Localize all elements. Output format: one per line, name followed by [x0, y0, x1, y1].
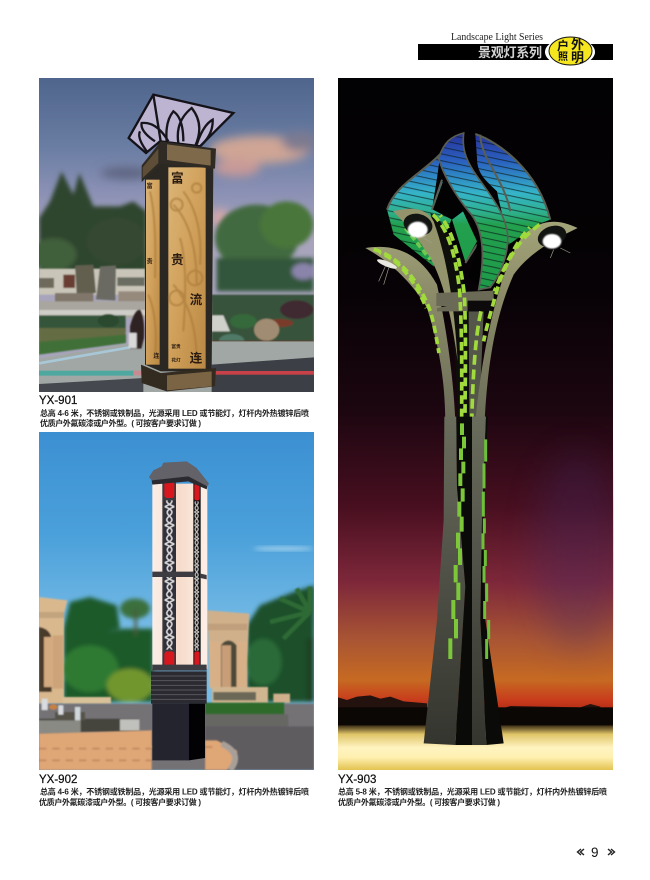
carved characters: 连 — [153, 351, 159, 360]
column cap — [142, 141, 216, 182]
lamp column — [149, 461, 209, 760]
page number — [578, 845, 614, 860]
centre collar — [436, 291, 494, 311]
base — [152, 704, 189, 760]
center leaf in front — [439, 133, 508, 290]
description: YX-902: 优质户外氟碳漆或户外型。( 可按客户要求订做 ) — [39, 797, 201, 807]
lamp top: lotus canopy — [129, 95, 233, 153]
trunk — [424, 417, 504, 745]
black banner bar — [418, 44, 613, 60]
palm fronds — [270, 587, 310, 639]
carved characters: 贵 — [147, 256, 153, 265]
sky — [39, 432, 314, 770]
trunk left face — [424, 417, 465, 745]
thin cloud — [253, 547, 313, 551]
hedge, road and fountain — [39, 699, 314, 770]
series title in English: Landscape Light Series — [451, 32, 543, 43]
carved characters: 贵 — [171, 249, 184, 268]
description: YX-901: 总高 4-6 米，不锈钢或铁制品，光源采用 LED 或节能灯，灯杆内外热镀锌后喷 — [40, 408, 309, 418]
white light panels — [152, 484, 207, 669]
carved characters: 富贵 — [171, 343, 181, 350]
column frame — [145, 161, 213, 371]
right arch building — [207, 610, 290, 704]
side panel — [146, 180, 160, 365]
ribbed collar — [151, 671, 207, 704]
left outer arm — [365, 247, 456, 428]
side scroll ornament — [193, 482, 201, 670]
stone wall and sculptures — [39, 265, 145, 303]
flame leaves — [387, 134, 550, 288]
horizon treeline — [338, 695, 613, 726]
lawn and paths — [39, 295, 314, 355]
front scroll ornament — [162, 481, 176, 670]
description: YX-903 — [338, 786, 607, 807]
front panel — [168, 167, 206, 369]
red lights — [164, 481, 200, 668]
series title in Chinese: 景观灯系列 — [478, 45, 542, 60]
description: YX-902 — [39, 786, 309, 807]
trees — [62, 585, 314, 702]
purple haze — [534, 451, 620, 651]
left leaf — [387, 154, 452, 266]
carved characters — [147, 168, 203, 367]
lamp roof — [149, 461, 209, 487]
carved characters: 连 — [190, 348, 203, 367]
middle arm, green band — [430, 213, 469, 428]
page number: 9 — [591, 845, 599, 860]
description: YX-903: 优质户外氟碳漆或户外型。( 可按客户要求订做 ) — [338, 797, 500, 807]
green LED checks — [374, 215, 540, 428]
label: YX-902: YX-902 — [39, 774, 77, 786]
middle arm, metal face — [393, 209, 458, 361]
panel: YX-903 photo — [338, 78, 614, 770]
right green strip — [483, 439, 489, 659]
carved blossoms — [148, 183, 202, 361]
description: YX-901: 优质户外氟碳漆或户外型。( 可按客户要求订做 ) — [40, 418, 201, 428]
inner small leaf — [452, 211, 477, 262]
gaps between leaves — [433, 181, 484, 288]
lower band — [152, 665, 207, 671]
trunk right shadow — [480, 417, 504, 745]
left arch building — [39, 597, 111, 704]
left green strip — [450, 423, 464, 659]
panel: YX-901 photo — [39, 78, 314, 392]
badge: outdoor lighting — [545, 34, 595, 66]
badge: outdoor lighting: 外 — [571, 34, 584, 53]
carved characters: 富 — [171, 168, 184, 187]
spot lights — [376, 211, 570, 285]
glowing ground — [338, 725, 613, 770]
people — [129, 310, 144, 349]
centre post — [469, 311, 484, 428]
lamp column — [141, 141, 216, 391]
right arm — [475, 222, 578, 428]
pavement and road — [39, 341, 314, 392]
sky — [39, 78, 314, 392]
middle band — [152, 572, 207, 579]
night sunset sky — [338, 78, 613, 770]
leaf frames — [387, 134, 550, 263]
clouds — [100, 131, 318, 226]
description: YX-901 — [40, 408, 309, 428]
badge: outdoor lighting: 户 — [557, 37, 569, 54]
right leaf — [475, 134, 550, 245]
carved characters: 花灯 — [171, 356, 181, 363]
badge: outdoor lighting: 照 — [558, 48, 568, 63]
header: series banner — [418, 32, 613, 66]
lamp arms — [365, 133, 578, 428]
background trees — [30, 171, 315, 291]
column base — [141, 365, 216, 391]
label: YX-901: YX-901 — [39, 395, 77, 407]
slats on side leaves — [387, 134, 550, 266]
carved characters: 流 — [190, 289, 203, 308]
badge: outdoor lighting: 明 — [571, 47, 584, 66]
brick plaza — [39, 730, 237, 770]
carved characters: 富 — [147, 181, 153, 190]
trunk right face — [472, 417, 486, 745]
description: YX-903: 总高 5-8 米，不锈钢或铁制品，光源采用 LED 或节能灯，灯杆内外热镀锌后喷 — [338, 786, 607, 796]
label: YX-903: YX-903 — [338, 774, 376, 786]
description: YX-902: 总高 4-6 米，不锈钢或铁制品，光源采用 LED 或节能灯，灯杆内外热镀锌后喷 — [40, 786, 309, 796]
trunk center shadow — [455, 417, 472, 745]
panel: YX-902 photo — [39, 432, 314, 770]
